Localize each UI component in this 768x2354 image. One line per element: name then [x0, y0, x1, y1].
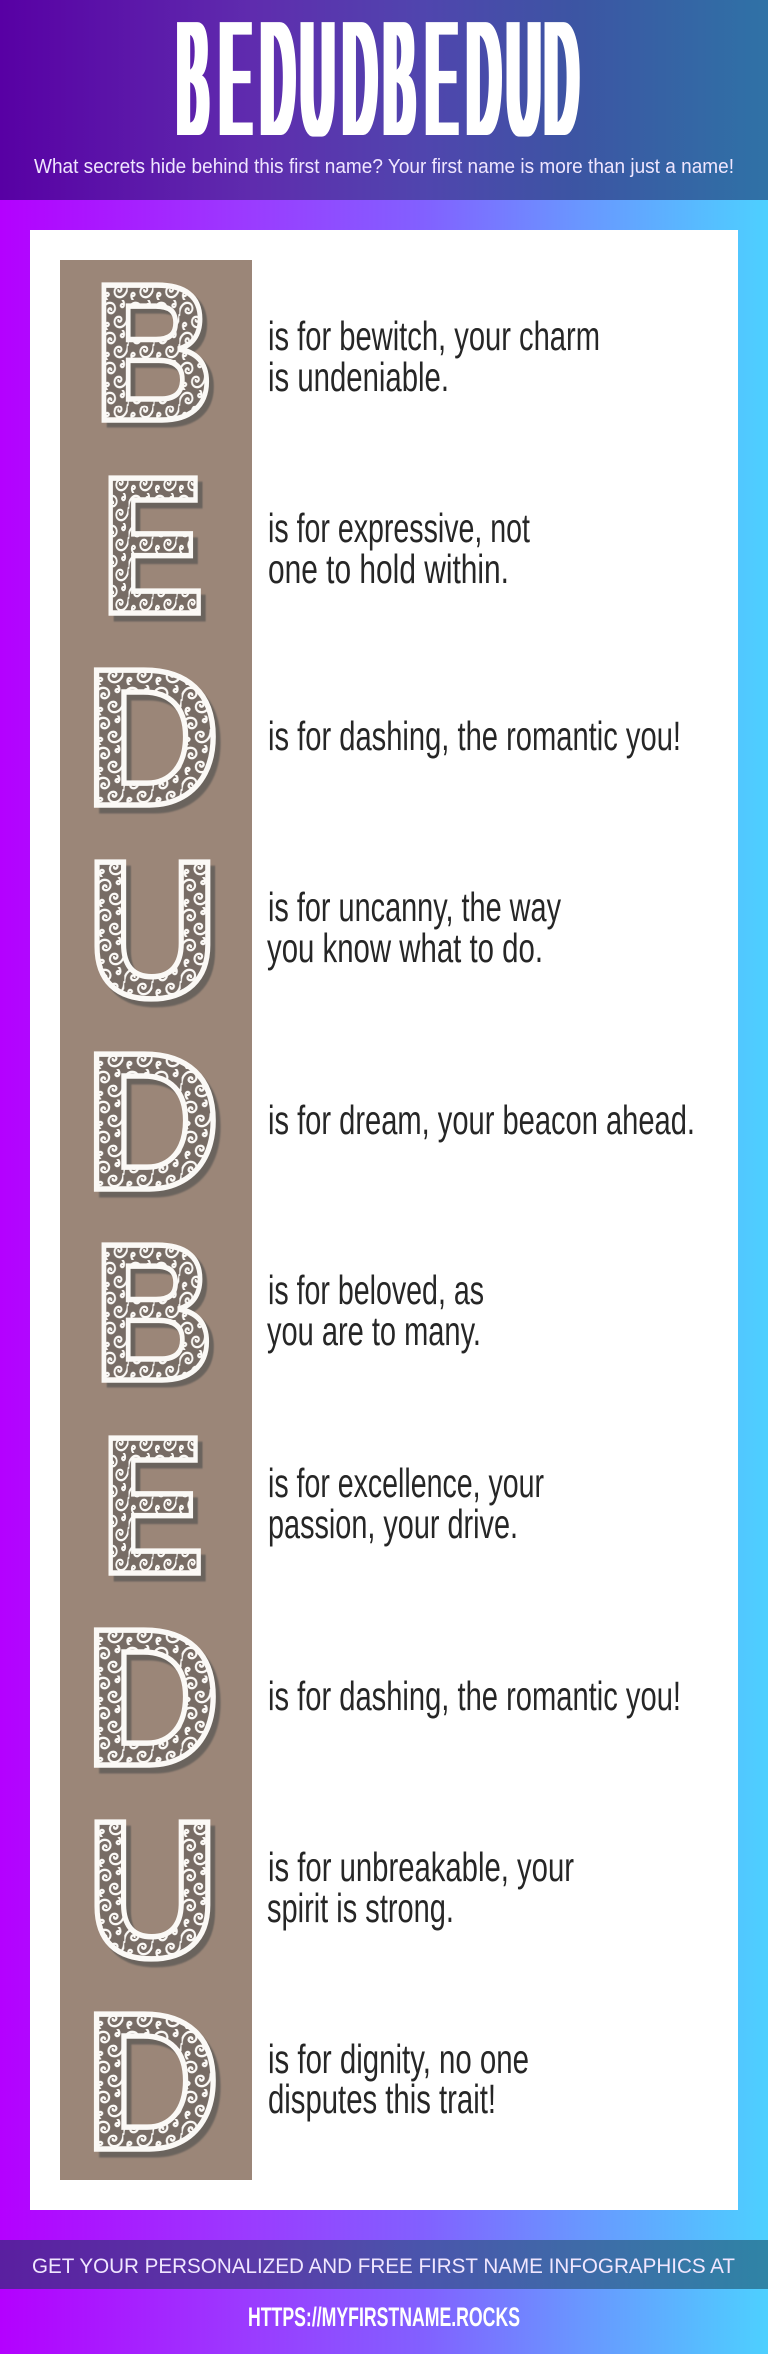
header band	[0, 0, 768, 200]
letter B: B	[93, 243, 214, 462]
meaning: B beloved	[267, 1267, 484, 1354]
letter D: D	[89, 1977, 226, 2197]
meaning: U unbreakable: is for unbreakable, your	[268, 1844, 574, 1890]
meaning: E excellence: is for excellence, your	[268, 1460, 544, 1506]
letter U: U	[91, 1787, 224, 2005]
meaning: E excellence: passion, your drive.	[268, 1501, 518, 1547]
meaning: D dignity	[268, 2036, 529, 2122]
meaning: U unbreakable: spirit is strong.	[267, 1885, 454, 1931]
letter E: E	[105, 441, 210, 661]
meaning: U uncanny: you know what to do.	[267, 925, 543, 971]
footer call to action: GET YOUR PERSONALIZED AND FREE FIRST NAME INFOGRAPHICS AT	[32, 2255, 735, 2278]
letter U: U	[86, 821, 219, 1039]
meaning: B bewitch: is for bewitch, your charm	[268, 313, 600, 359]
letter U: U	[91, 827, 224, 1045]
meaning: E expressive	[268, 505, 530, 592]
meaning: U uncanny	[267, 884, 561, 971]
meaning: E expressive: is for expressive, not	[268, 505, 530, 551]
meaning: B bewitch: is undeniable.	[268, 354, 449, 400]
letter B: B	[93, 1203, 214, 1422]
letter B: B	[98, 248, 219, 467]
meaning: B beloved: you are to many.	[267, 1308, 481, 1354]
subtitle: What secrets hide behind this first name? Your first name is more than just a name!	[34, 155, 734, 178]
meaning: D dignity: is for dignity, no one	[268, 2036, 529, 2082]
white content panel	[30, 230, 738, 2210]
letter E: E	[100, 1395, 205, 1615]
meaning: B beloved: is for beloved, as	[268, 1267, 484, 1313]
letter D: D	[84, 1011, 221, 1231]
letter B: B	[98, 1208, 219, 1427]
letter D: D	[89, 633, 226, 853]
letter D: D	[84, 1971, 221, 2191]
meaning: U uncanny: is for uncanny, the way	[268, 884, 561, 930]
brown letter column	[60, 260, 252, 2180]
letter E: E	[105, 1401, 210, 1621]
meaning: D dignity: disputes this trait!	[268, 2076, 496, 2122]
letter D: D	[84, 1587, 221, 1807]
footer url: HTTPS://MYFIRSTNAME.ROCKS	[248, 2302, 520, 2332]
letter D: D	[84, 627, 221, 847]
meaning: U unbreakable	[267, 1844, 574, 1931]
letter D: D	[89, 1017, 226, 1237]
letter U: U	[86, 1781, 219, 1999]
footer band	[0, 2240, 768, 2289]
letter E: E	[100, 435, 205, 655]
meaning: E excellence	[268, 1460, 544, 1547]
meaning: E expressive: one to hold within.	[268, 546, 509, 592]
letter D: D	[89, 1593, 226, 1813]
meaning: B bewitch	[268, 313, 600, 400]
